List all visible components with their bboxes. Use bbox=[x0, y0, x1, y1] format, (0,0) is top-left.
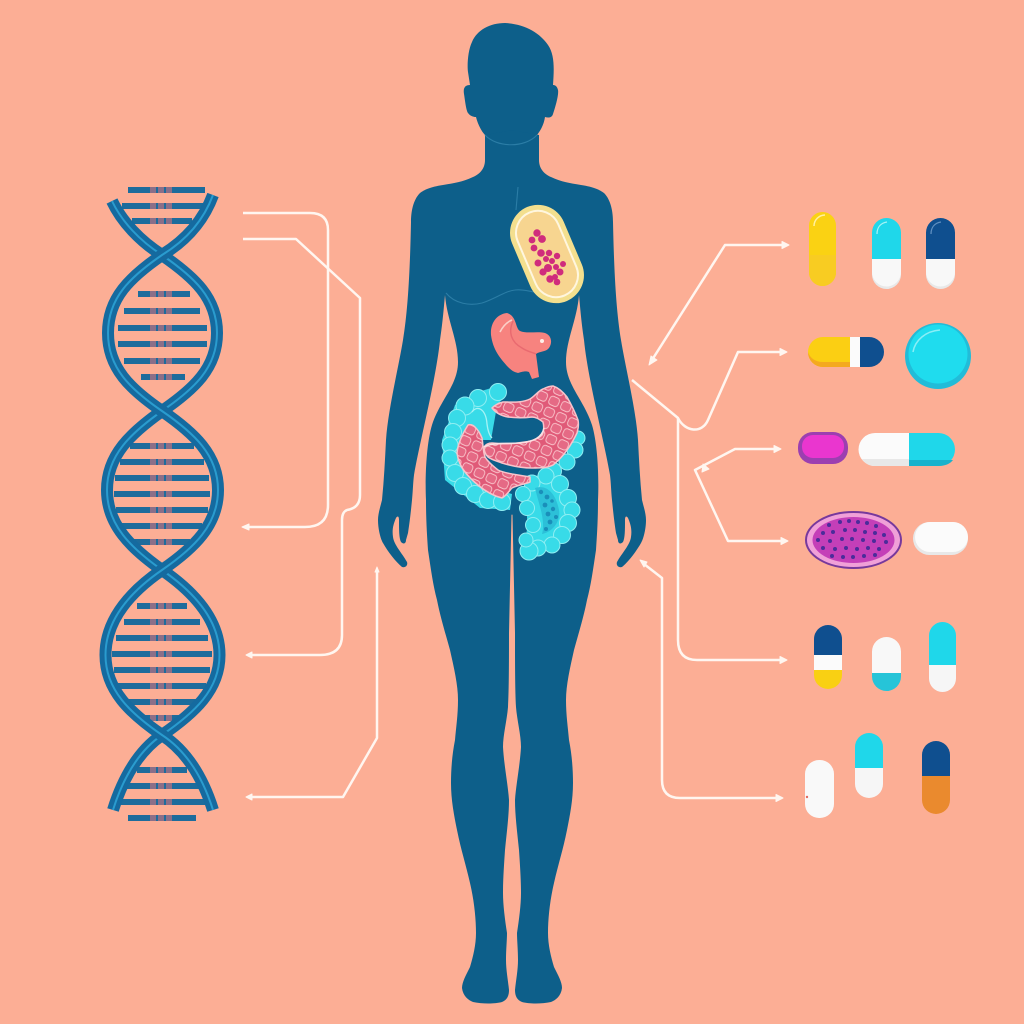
row 4 pills bbox=[806, 512, 968, 568]
DNA base-pair rungs bbox=[112, 190, 212, 818]
pill: round cyan tablet bbox=[905, 323, 971, 389]
pill: cyan and white capsule bbox=[929, 622, 956, 692]
arrow: to second pills row bbox=[632, 348, 787, 430]
pink lower small intestine bbox=[457, 425, 530, 498]
pill: white oblong tablet bbox=[913, 522, 968, 555]
arrow: to fifth pills row bbox=[678, 418, 787, 664]
pill: cyan and white capsule bbox=[855, 733, 883, 798]
pill: cyan and white capsule bbox=[872, 218, 901, 289]
row 2 pills bbox=[808, 323, 971, 389]
pill: magenta tablet bbox=[798, 432, 848, 464]
organ: stomach bbox=[491, 313, 551, 379]
pill: navy and white capsule bbox=[926, 218, 955, 289]
cyan colon left arc bbox=[442, 384, 512, 510]
pale loop outlines inside intestine bbox=[484, 428, 544, 447]
pill: yellow capsule bbox=[809, 212, 836, 286]
pill: purple speckled oval bbox=[806, 512, 901, 568]
DNA strand A bbox=[107, 201, 220, 810]
row 5 pills bbox=[814, 622, 956, 692]
human body silhouette bbox=[378, 23, 646, 1004]
cyan colon lower right bbox=[516, 431, 585, 560]
DNA double helix bbox=[106, 190, 220, 818]
pill: white and cyan capsule bbox=[872, 637, 901, 691]
pink upper small intestine bbox=[484, 386, 578, 468]
row 3 pills bbox=[798, 432, 955, 466]
DNA strand B bbox=[106, 195, 218, 810]
arrow: to bottom pills row bbox=[640, 560, 783, 802]
arrow: long left bracket bbox=[243, 239, 360, 658]
pill: white capsule bbox=[805, 760, 834, 818]
left connector arrows bbox=[242, 213, 379, 800]
pill: yellow white navy horizontal capsule bbox=[808, 337, 884, 367]
right connector arrows bbox=[632, 242, 789, 802]
organ: liver-like oval with magenta cells bbox=[501, 196, 593, 312]
pill: navy and orange capsule bbox=[922, 741, 950, 814]
arrow: to top pills row bbox=[649, 242, 789, 365]
pill: navy white yellow capsule bbox=[814, 625, 842, 689]
pill: white and cyan capsule bbox=[858, 433, 955, 466]
row 1 pills bbox=[809, 212, 955, 289]
organ: large intestine and small intestine bbox=[442, 384, 585, 560]
arrow: lower left bracket bbox=[246, 567, 379, 800]
row 6 pills bbox=[805, 733, 950, 818]
arrow: forked to third and fourth rows bbox=[695, 446, 788, 544]
arrow: upper left bracket bbox=[242, 213, 328, 530]
